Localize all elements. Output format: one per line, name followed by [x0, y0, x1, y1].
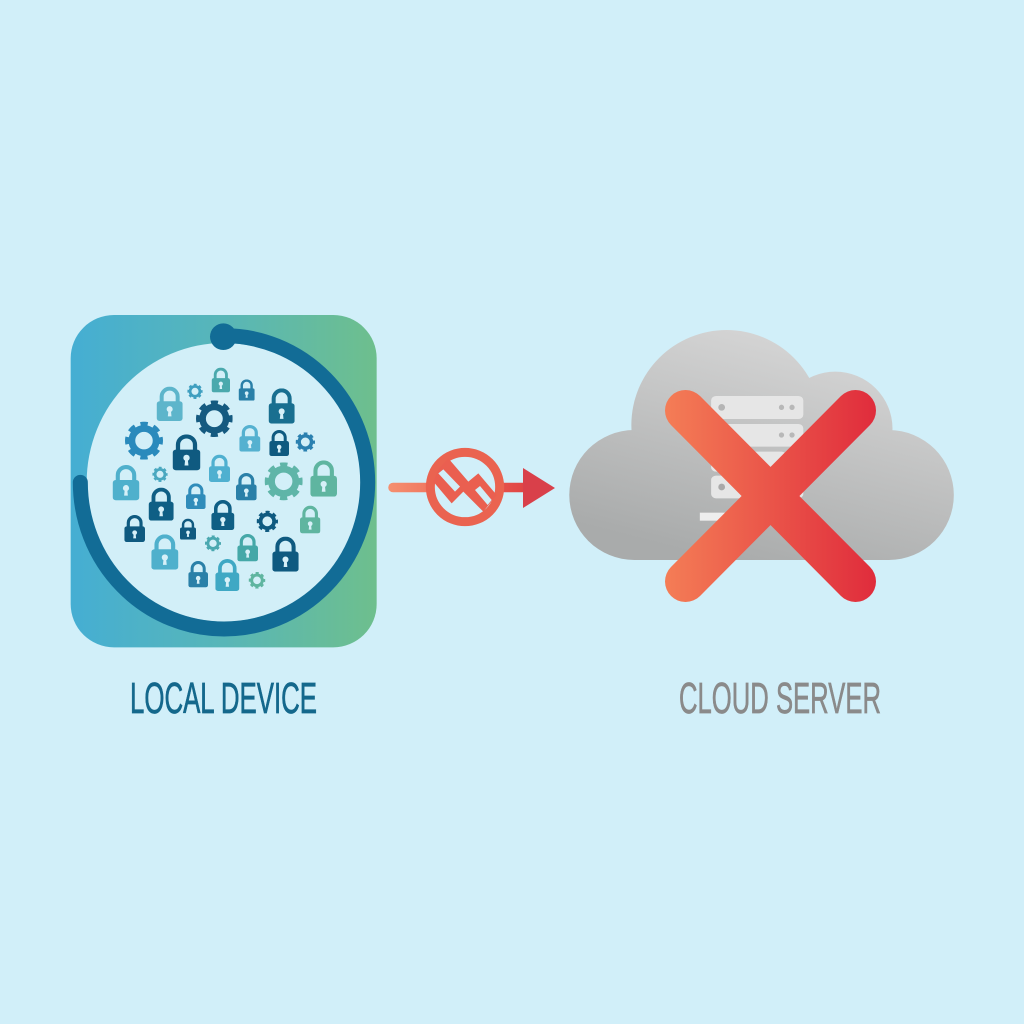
icon: lock 13 — [186, 485, 206, 509]
panel: local device — [71, 315, 377, 647]
server unit 3 — [711, 452, 786, 472]
zigzag band — [433, 458, 497, 512]
icon: lock 4 — [269, 390, 295, 424]
icon: gear 2 — [198, 403, 230, 435]
icon: gear 6 — [267, 465, 300, 498]
cloud shape — [569, 330, 954, 560]
cloud and servers — [569, 330, 954, 560]
icon: lock 10 — [236, 475, 257, 500]
icon: lock 15 — [124, 517, 145, 542]
icon: lock 11 — [310, 462, 337, 497]
icon: lock 21 — [188, 563, 208, 587]
icon: gear 5 — [153, 468, 167, 481]
icon: lock 20 — [272, 539, 299, 572]
light circle — [87, 343, 361, 622]
icon: lock 17 — [300, 507, 320, 533]
arrow line — [393, 483, 526, 492]
rounded gradient tile — [71, 315, 377, 647]
icon: lock 18 — [151, 536, 178, 570]
ring start dot — [210, 323, 237, 350]
icon: lock 5 — [239, 427, 260, 452]
icon: lock 6 — [269, 431, 289, 456]
slit left — [438, 469, 460, 492]
arrow head — [523, 468, 555, 508]
server unit 2 — [711, 424, 803, 447]
server rack — [700, 396, 803, 521]
icon: lock 8 — [209, 456, 230, 482]
icon cluster: locks and gears — [113, 369, 337, 591]
icon: lock 14 — [211, 502, 234, 530]
icon: broken signal — [430, 452, 500, 522]
label: cloud server: CLOUD SERVER — [679, 674, 881, 723]
arrow: blocked connection — [393, 452, 555, 522]
panel: cloud server — [569, 330, 954, 582]
icon: lock 9 — [113, 467, 139, 500]
label: local device: LOCAL DEVICE — [130, 674, 317, 723]
signal ring — [430, 452, 500, 522]
icon: lock 22 — [215, 561, 239, 591]
icon: lock 19 — [237, 536, 258, 561]
icon: lock 12 — [149, 490, 174, 521]
progress ring — [80, 336, 368, 629]
icon: gear 9 — [250, 573, 264, 588]
icon: gear 4 — [297, 433, 314, 451]
red X — [686, 410, 856, 582]
icon: gear 3 — [127, 424, 161, 457]
icon: lock 7 — [173, 436, 200, 470]
server unit 4 — [711, 476, 803, 498]
icon: lock 16 — [180, 520, 196, 540]
icon: lock 3 — [239, 381, 255, 401]
slit right — [475, 486, 492, 505]
icon: gear 8 — [206, 536, 220, 550]
icon: gear 1 — [188, 385, 202, 398]
server unit 1 — [711, 396, 803, 419]
icon: lock 2 — [212, 369, 230, 392]
icon: lock 1 — [157, 389, 183, 421]
icon: gear 7 — [258, 512, 277, 531]
server base — [700, 513, 749, 521]
